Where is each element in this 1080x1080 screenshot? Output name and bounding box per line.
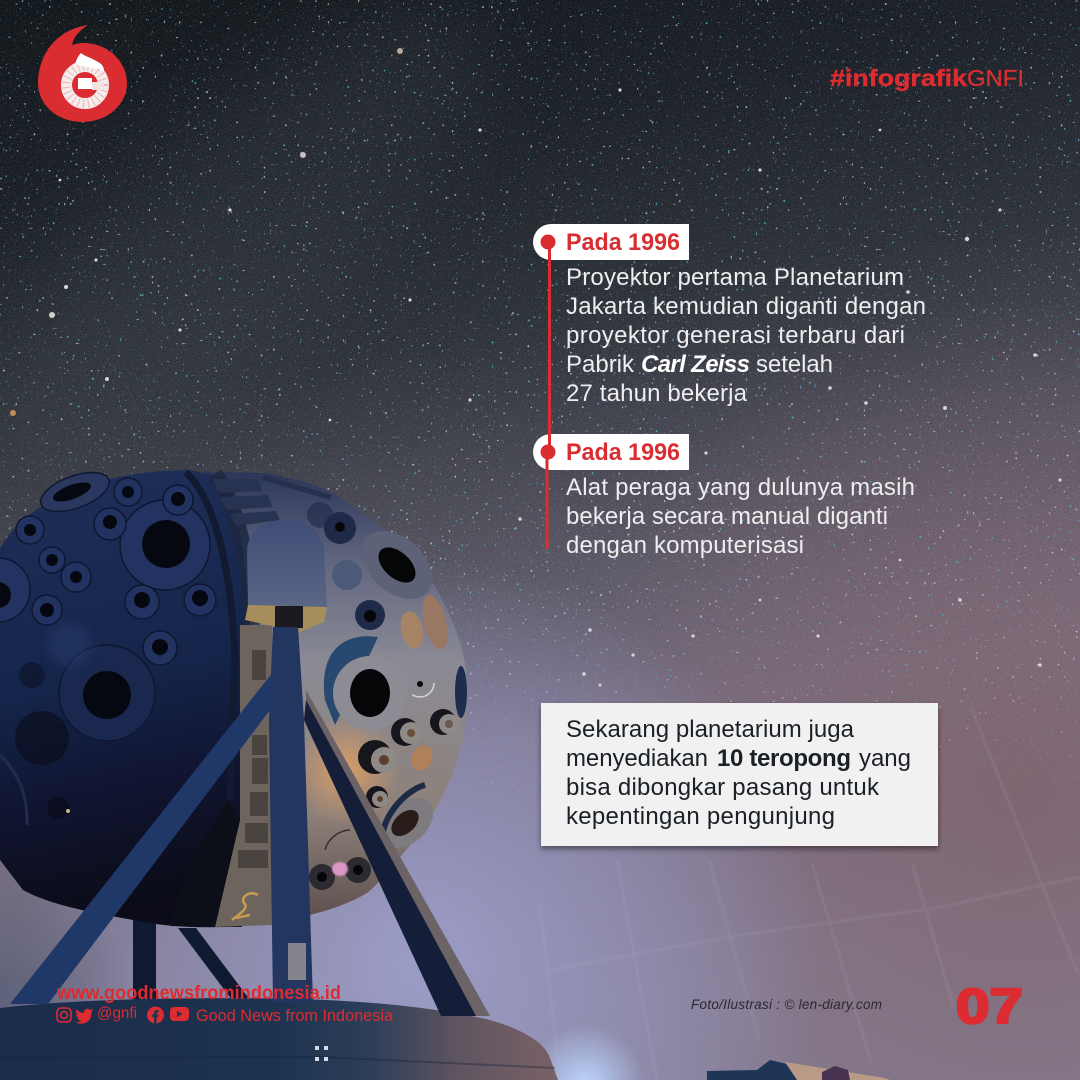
entry 1 text: Pabrik [566,351,635,378]
page number: 07 [956,980,1023,1034]
entry 2 heading: Pada 1996 [566,439,680,466]
footer social row [57,1005,394,1025]
timeline line [546,242,551,549]
entry 1 text [566,264,926,407]
logo red drop [38,25,127,122]
entry 1 text: setelah [756,351,833,378]
entry 1 text: Jakarta kemudian diganti dengan [566,293,926,320]
icon: youtube [170,1007,189,1021]
entry 1 text: proyektor generasi terbaru dari [566,322,905,349]
hashtag: GNFI [967,65,1024,91]
left leg [10,672,273,1004]
callout box [541,703,938,846]
right light hemisphere [205,472,467,927]
logo white ring [66,66,104,104]
top vents [212,479,280,526]
entry 1 heading [533,224,689,260]
central vent strip [215,625,272,927]
entry 2 heading [533,434,689,470]
callout text: yang [859,745,911,772]
footer website: www.goodnewsfromindonesia.id [56,983,341,1004]
centre post [269,627,313,1002]
entry 2 text: bekerja secara manual diganti [566,503,888,530]
callout text: menyediakan [566,745,708,772]
small lenses, right [307,502,385,890]
logo: GNFI [38,25,127,122]
right leg, outer edge [306,690,490,1016]
photo: tripod legs [10,627,490,1016]
handle: @gnfi [97,1005,137,1022]
lens holes, left [0,479,208,819]
gold maker mark [232,893,258,920]
entry 1 heading: Pada 1996 [566,229,680,256]
photo: Zeiss projector sphere [0,465,470,930]
side vents [238,650,268,868]
photo credit: Foto/Ilustrasi : © len-diary.com [691,997,882,1012]
callout text: Sekarang planetarium juga [566,716,855,743]
callout text: kepentingan pengunjung [566,803,835,830]
callout text: 10 teropong [717,745,851,772]
callout text [566,716,911,830]
logo eagle head [75,53,104,71]
entry 2 text: dengan komputerisasi [566,532,804,559]
entry 1 text: Proyektor pertama Planetarium [566,264,904,291]
entry 1 text: Carl Zeiss [641,351,750,378]
dark lens rings, left [0,465,216,741]
callout text: bisa dibongkar pasang untuk [566,774,880,801]
photo: back legs of the tripod [133,918,250,1002]
channel name: Good News from Indonesia [196,1006,394,1025]
hashtag [830,65,1024,91]
entry 1 text: 27 tahun bekerja [566,380,748,407]
right leg, navy face [304,700,476,1016]
left dark hemisphere [0,470,250,927]
photo: planetarium base [0,998,558,1080]
pink light glint [332,862,348,876]
lens rings, right [324,636,378,725]
hashtag: #infografik [830,65,967,91]
photo: telescope at bottom right [707,1060,890,1080]
logo letter G [78,75,104,90]
icon: instagram [57,1008,71,1022]
icon: twitter [76,1009,93,1024]
entry 2 text: Alat peraga yang dulunya masih [566,474,915,501]
photo: cap on the tripod head [245,520,327,632]
central belt [186,472,235,800]
icon: facebook [147,1006,164,1024]
entry 2 text [566,474,915,559]
timeline [533,224,926,559]
